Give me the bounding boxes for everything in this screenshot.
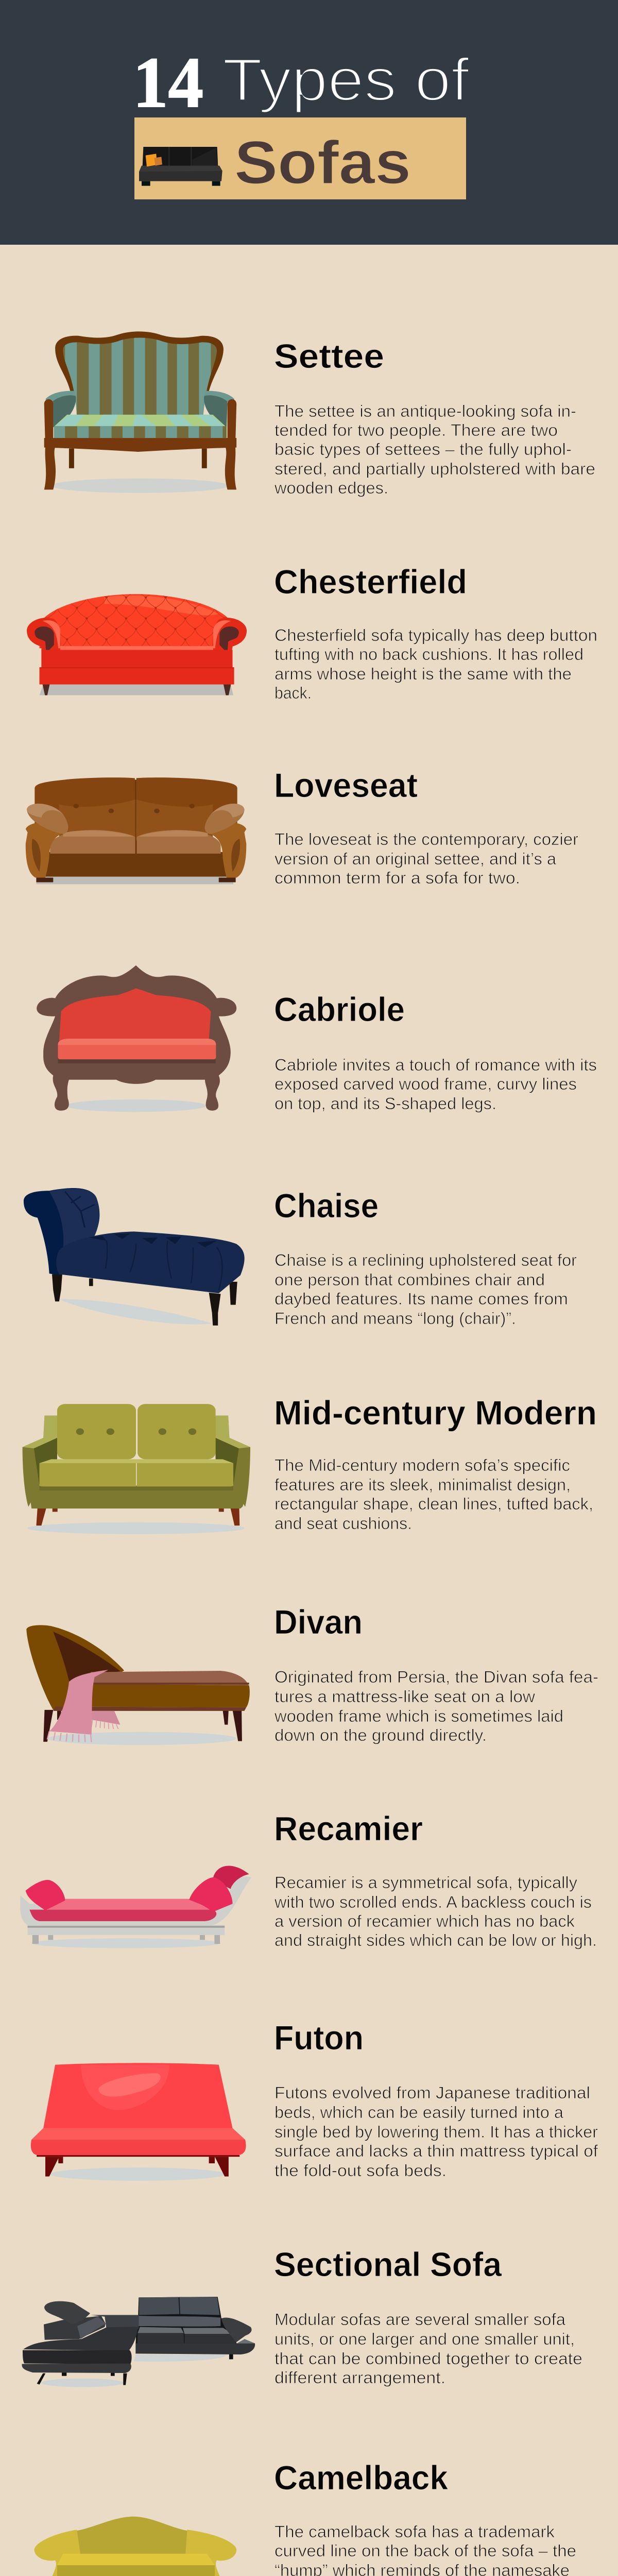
sofa illustration: mid-century modern [23,1404,250,1534]
section: Futon [31,2019,598,2181]
description: arms whose height is the same with the [274,665,572,683]
description [274,1456,593,1533]
description: that can be combined together to create [274,2349,582,2368]
section: Settee [44,331,595,497]
heading: Settee [274,337,384,375]
description: rectangular shape, clean lines, tufted back, [274,1495,593,1513]
heading: Camelback [274,2459,448,2497]
description: one person that combines chair and [274,1270,545,1289]
description: features are its sleek, minimalist design, [274,1476,571,1494]
title: 14 Types of: 14 [133,43,203,123]
description: wooden edges. [274,479,388,497]
description: daybed features. Its name comes from [274,1290,568,1308]
description: wooden frame which is sometimes laid [274,1707,563,1725]
description: Originated from Persia, the Divan sofa fea- [274,1668,598,1686]
heading: Divan [274,1603,363,1641]
section: Mid-century Modern [23,1394,597,1534]
sofa illustration: sectional [22,2297,255,2387]
description: exposed carved wood frame, curvy lines [274,1075,577,1093]
description: units, or one larger and one smaller unit, [274,2330,575,2348]
description: basic types of settees – the fully uphol- [274,440,572,459]
description: and straight sides which can be low or high. [274,1931,597,1950]
sofa illustration: loveseat [26,777,246,884]
description: Cabriole invites a touch of romance with its [274,1056,597,1074]
description: Futons evolved from Japanese traditional [274,2083,590,2102]
section: Chesterfield [27,563,597,702]
heading: Futon [274,2019,364,2057]
description: The camelback sofa has a trademark [274,2522,555,2541]
header band [0,0,618,245]
sofa illustration: chaise [24,1188,245,1326]
description [274,1251,577,1328]
description: stered, and partially upholstered with bare [274,460,595,478]
description: version of an original settee, and it’s a [274,850,556,868]
section: Camelback [35,2459,576,2576]
heading: Chesterfield [274,563,467,601]
description: and seat cushions. [274,1514,412,1533]
heading: Chaise [274,1187,379,1225]
description: tures a mattress-like seat on a low [274,1687,536,1706]
sofa illustration: chesterfield [27,594,247,696]
description [274,1056,597,1113]
description: tended for two people. There are two [274,421,558,439]
heading: Recamier [274,1809,423,1848]
sofa illustration: divan [26,1625,250,1745]
title banner: Sofas: Sofas [234,129,411,197]
description: Modular sofas are several smaller sofa [274,2310,565,2329]
description: surface and lacks a thin mattress typical of [274,2142,598,2160]
heading: Loveseat [274,766,418,804]
section: Sectional Sofa [22,2245,582,2387]
sofa illustration: camelback [35,2517,236,2576]
heading: Sectional Sofa [274,2245,502,2283]
description [274,626,597,702]
description: French and means “long (chair)”. [274,1309,516,1328]
description [274,2522,576,2576]
description [274,2310,582,2387]
description: tufting with no back cushions. It has rolled [274,645,583,664]
description: common term for a sofa for two. [274,869,520,887]
description [274,1873,597,1950]
section: Divan [26,1603,598,1745]
section: Loveseat [26,766,578,887]
section: Cabriole [37,965,597,1113]
description: on top, and its S-shaped legs. [274,1094,496,1113]
description: The loveseat is the contemporary, cozier [274,830,578,849]
sofa illustration: cabriole [37,965,236,1112]
description: Recamier is a symmetrical sofa, typically [274,1873,577,1892]
section: Chaise [24,1187,577,1328]
description: The settee is an antique-looking sofa in- [274,402,576,420]
title: 14 Types of [133,43,470,123]
description: Chaise is a reclining upholstered seat for [274,1251,577,1269]
description: Chesterfield sofa typically has deep button [274,626,597,645]
description: different arrangement. [274,2368,445,2387]
title: 14 Types of: Types of [222,46,470,113]
title banner: Sofas [134,117,466,199]
description: single bed by lowering them. It has a thicker [274,2123,598,2141]
description [274,1668,598,1744]
section: Recamier [20,1809,597,1950]
description [274,402,595,497]
heading: Mid-century Modern [274,1394,597,1432]
description: curved line on the back of the sofa – the [274,2541,576,2560]
description [274,830,578,887]
description: back. [274,684,312,702]
description: the fold-out sofa beds. [274,2161,447,2180]
sofa illustration: recamier [20,1866,251,1948]
sofa illustration: futon [31,2063,246,2181]
icon: black sofa [139,147,222,186]
description: beds, which can be easily turned into a [274,2103,563,2122]
description: The Mid-century modern sofa’s specific [274,1456,570,1475]
description: with two scrolled ends. A backless couch is [274,1893,592,1911]
sofa illustration: settee [44,331,236,493]
description [274,2083,598,2180]
description: a version of recamier which has no back [274,1912,575,1930]
description: down on the ground directly. [274,1726,487,1744]
heading: Cabriole [274,990,405,1028]
